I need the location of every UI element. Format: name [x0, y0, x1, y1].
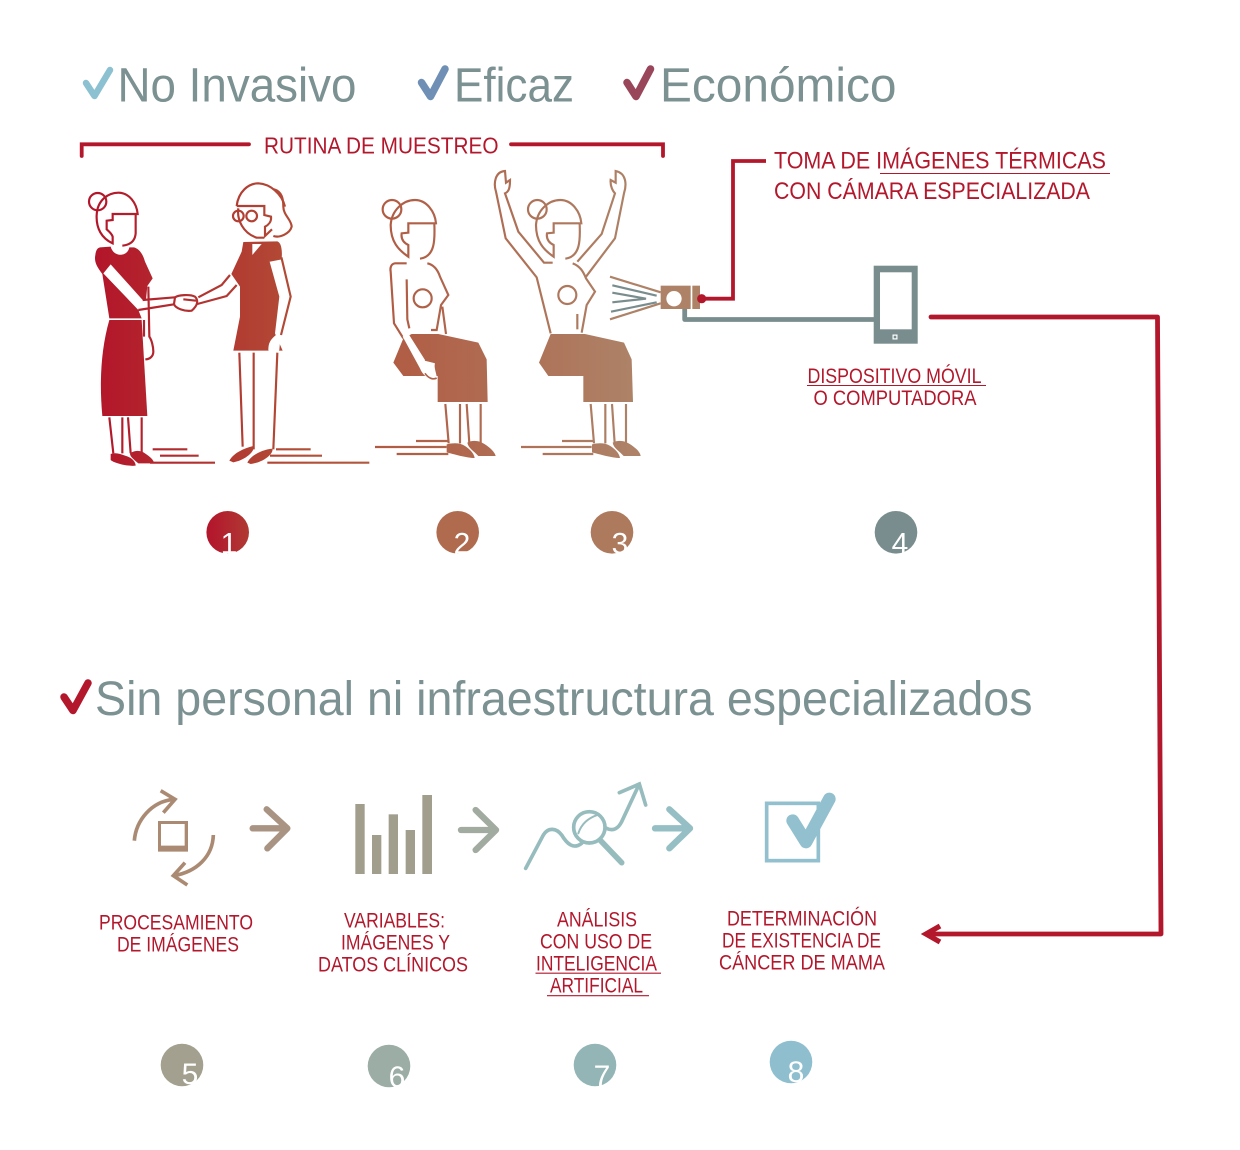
text: toma de imagenes termicas: [774, 148, 1110, 205]
number 5: [161, 1044, 203, 1091]
icon: ai analysis: [526, 784, 646, 868]
figure: woman in dress: [89, 193, 215, 466]
text: analisis: [536, 909, 661, 998]
icon: checkbox: [767, 799, 829, 861]
arrow: device to results: [926, 317, 1161, 942]
heading: economico: Económico: [660, 60, 896, 112]
number 2: [436, 511, 479, 560]
number 2: 2: [454, 528, 470, 560]
arrow: step 6 to 7: [461, 810, 496, 850]
text: analisis: ARTIFICIAL: [550, 975, 643, 998]
text: toma de imagenes termicas: TOMA DE IMÁGENES TÉRMICAS: [774, 148, 1106, 174]
text: dispositivo movil: DISPOSITIVO MÓVIL: [808, 365, 982, 388]
figure: woman with glasses: [197, 183, 369, 464]
number 8: [770, 1041, 812, 1089]
icon: connector dot: [697, 294, 706, 303]
number 1: [206, 511, 249, 560]
heading: sin personal: Sin personal ni infraestructura especializados: [95, 673, 1032, 726]
arrow: step 5 to 6: [253, 809, 287, 848]
callout line: thermal images: [702, 161, 766, 299]
text: procesamiento: DE IMÁGENES: [117, 934, 239, 956]
connector: camera to mobile device: [685, 309, 874, 320]
text: determinacion: CÁNCER DE MAMA: [719, 952, 885, 975]
text: analisis: ANÁLISIS: [557, 909, 637, 932]
text: variables: IMÁGENES Y: [341, 932, 450, 954]
illustration: seated women: [375, 171, 641, 458]
text: determinacion: [719, 908, 885, 975]
text: procesamiento: [99, 912, 253, 956]
number 8: 8: [788, 1056, 804, 1089]
text: variables: DATOS CLÍNICOS: [318, 954, 468, 976]
number 5: 5: [182, 1058, 198, 1091]
number 3: [591, 511, 633, 560]
text: determinacion: DETERMINACIÓN: [727, 908, 877, 931]
figure: seated woman, arms raised: [495, 171, 641, 458]
bracket: rutina de muestreo: [82, 132, 663, 158]
number 6: [368, 1045, 410, 1094]
icon: bar chart: [355, 795, 432, 874]
icon: thermal camera: [610, 277, 700, 319]
icon: image processing: [134, 791, 213, 885]
heading: no invasivo: No Invasivo: [118, 60, 356, 112]
number 1: 1: [221, 528, 237, 560]
text: determinacion: DE EXISTENCIA DE: [722, 930, 881, 953]
number 7: [574, 1044, 616, 1093]
text: dispositivo movil: [807, 365, 986, 410]
number 3: 3: [612, 528, 628, 560]
heading: eficaz: Eficaz: [454, 60, 574, 112]
arrow: step 7 to 8: [655, 809, 690, 848]
text: analisis: INTELIGENCIA: [536, 953, 657, 976]
number 4: [875, 511, 917, 560]
text: procesamiento: PROCESAMIENTO: [99, 912, 253, 934]
text: dispositivo movil: O COMPUTADORA: [814, 387, 976, 410]
text: variables: VARIABLES:: [344, 910, 445, 932]
bracket: rutina de muestreo: RUTINA DE MUESTREO: [264, 132, 498, 158]
number 7: 7: [594, 1060, 610, 1093]
number 6: 6: [389, 1061, 405, 1094]
text: variables: [318, 910, 468, 976]
text: analisis: CON USO DE: [540, 930, 652, 953]
number 4: 4: [892, 528, 908, 560]
icon: mobile device: [874, 266, 918, 344]
text: toma de imagenes termicas: CON CÁMARA ESPECIALIZADA: [774, 178, 1090, 205]
figure: seated woman, arms down: [375, 200, 496, 458]
illustration: handshake: [89, 183, 369, 466]
